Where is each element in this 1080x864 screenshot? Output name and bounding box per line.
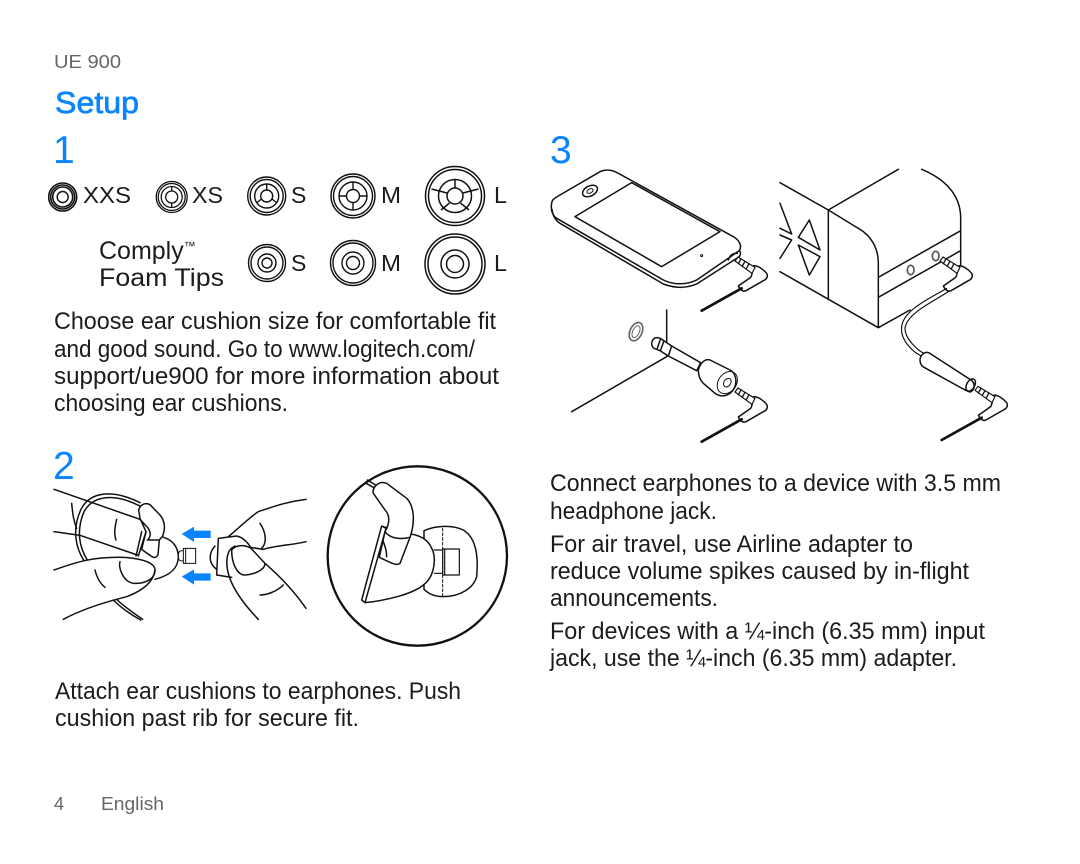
footer: language: English — [101, 794, 164, 814]
icon: plug — [735, 257, 767, 291]
label: Comply Foam Tips: Comply — [99, 237, 184, 265]
label: L: L — [494, 182, 507, 208]
label: XS: XS — [192, 182, 223, 208]
icon: foam L — [425, 234, 485, 294]
text: choose ear cushion: and good sound. Go to www.logitech.com/ — [54, 336, 475, 363]
illustration: fitting cushion by hand — [54, 489, 306, 620]
text: attach ear cushions: Attach ear cushions to earphones. Push — [55, 678, 461, 705]
illustration: cushion detail circle — [328, 466, 507, 646]
label: XXS: XXS — [83, 182, 131, 208]
label: Comply Foam Tips: Foam Tips — [99, 264, 224, 292]
step number 1: 1 — [53, 129, 75, 172]
arrow: lower — [182, 569, 211, 585]
panel: ear cushion sizes — [49, 166, 507, 294]
icon: plug — [975, 386, 1007, 420]
product name: UE 900 — [54, 52, 121, 72]
arrow: upper — [182, 527, 211, 542]
icon: foam S — [248, 244, 286, 282]
icon: plug — [940, 257, 972, 291]
text: choose ear cushion: choosing ear cushions. — [54, 390, 288, 417]
text: air travel: For air travel, use Airline adapter to — [550, 531, 913, 558]
label: Comply Foam Tips: ™ — [184, 239, 196, 253]
text: connect earphones — [550, 470, 1001, 525]
icon: M cushion — [331, 174, 375, 218]
step number 3: 3 — [550, 129, 572, 172]
text: quarter inch jack: For devices with a ¼-inch (6.35 mm) input — [550, 618, 985, 645]
label: foam S: S — [291, 250, 306, 276]
icon: XS cushion — [156, 182, 187, 212]
heading: Setup: Setup — [55, 85, 139, 120]
illustration: airline socket with adapter cable — [780, 169, 1007, 440]
text: connect earphones: headphone jack. — [550, 498, 717, 525]
step number 2: 2 — [53, 445, 75, 488]
text: air travel: announcements. — [550, 585, 718, 612]
icon: L cushion — [426, 166, 484, 226]
text: air travel: reduce volume spikes caused by in-flight — [550, 558, 969, 585]
illustration: phone with plug — [551, 170, 767, 311]
text: quarter inch jack: jack, use the ¼-inch (6.35 mm) adapter. — [549, 645, 957, 672]
text: attach ear cushions: cushion past rib for secure fit. — [55, 705, 359, 732]
footer: page number: 4 — [54, 794, 64, 814]
text: attach ear cushions — [55, 678, 461, 732]
icon: plug — [735, 388, 767, 422]
text: choose ear cushion: Choose ear cushion size for comfortable fit — [54, 308, 496, 335]
text: quarter inch jack — [549, 618, 985, 672]
text: choose ear cushion: support/ue900 for more information about — [54, 363, 499, 390]
label: Comply Foam Tips — [99, 237, 224, 292]
label: foam L: L — [494, 250, 507, 276]
label: S: S — [291, 182, 306, 208]
text: air travel — [550, 531, 969, 612]
icon: foam M — [330, 240, 376, 286]
text: connect earphones: Connect earphones to a device with 3.5 mm — [550, 470, 1001, 497]
text: choose ear cushion — [54, 308, 499, 417]
icon: XXS cushion — [49, 183, 77, 211]
label: M: M — [381, 182, 401, 208]
illustration: wall jack with adapter — [572, 310, 767, 442]
icon: S cushion — [248, 177, 286, 215]
label: foam M: M — [381, 250, 401, 276]
